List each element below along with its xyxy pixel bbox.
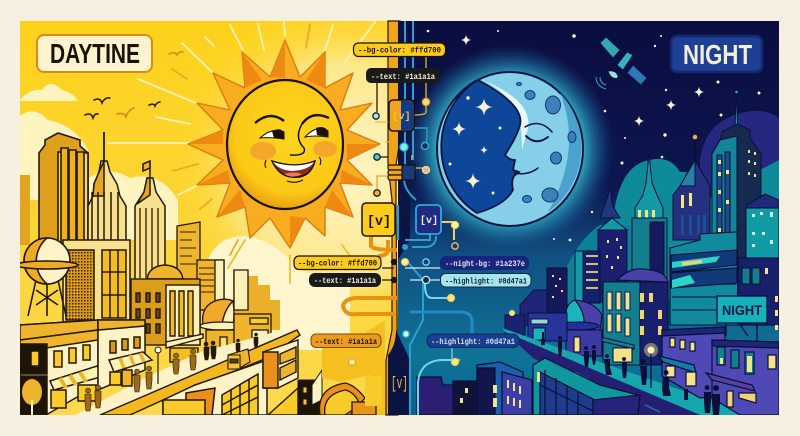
code label: middle text: --text: #1a1a1a — [314, 276, 376, 286]
mid tall building — [63, 240, 130, 322]
code label: highlight — [440, 274, 531, 287]
code label: middle text — [309, 273, 381, 287]
road — [100, 330, 300, 415]
dark towers — [505, 218, 667, 335]
night pedestrians — [541, 332, 720, 415]
street sidewalk — [75, 332, 272, 415]
yellow chip — [362, 203, 395, 236]
orange traces — [343, 236, 397, 314]
code label: lower text: --text: #1a1a1a — [315, 337, 377, 347]
code label: lower highlight: --highlight: #0d47a1 — [431, 337, 515, 347]
blue chip: [v] — [420, 215, 438, 227]
code label: top bg-color — [354, 43, 446, 56]
lower day yellow block — [322, 320, 385, 415]
tall tower — [39, 133, 88, 250]
dark night divider — [398, 21, 410, 415]
moon night side — [441, 80, 520, 213]
lower dark divider — [388, 330, 410, 415]
teal spire building — [600, 153, 663, 240]
day sky — [20, 21, 398, 415]
code label: top text: --text: #1a1a1a — [371, 72, 435, 82]
night sidewalk — [502, 328, 753, 415]
sun cheeks — [250, 141, 337, 160]
top split chip: [v] — [392, 111, 411, 123]
moon face — [514, 123, 552, 174]
domed building — [131, 265, 203, 362]
code label: night-bg — [440, 256, 529, 270]
code label: middle bg-color: --bg-color: #ffd700 — [298, 258, 377, 268]
satellite — [596, 37, 647, 89]
water tower — [16, 238, 78, 316]
label: daytime title: DAYTINE — [50, 38, 140, 69]
street lamp glow — [644, 343, 658, 388]
foreground building — [163, 360, 267, 415]
glow node — [348, 358, 356, 366]
top split chip — [389, 100, 414, 131]
sun smile — [265, 157, 321, 182]
spire building — [87, 132, 127, 240]
night shops — [659, 327, 779, 415]
connector nodes — [373, 98, 458, 366]
tree — [22, 379, 42, 415]
label: daytime title — [37, 35, 152, 72]
sun eyes and brows — [255, 115, 329, 155]
code label: lower text — [311, 334, 381, 348]
night foreground buildings — [417, 358, 640, 415]
domed night building — [596, 269, 668, 365]
night road — [505, 332, 700, 415]
corner shop — [20, 320, 104, 415]
code label: top bg-color: --bg-color: #ffd700 — [358, 46, 441, 56]
far tan building — [177, 222, 248, 310]
moon crescent highlight — [480, 79, 528, 150]
flag building — [135, 161, 165, 280]
billboard text: NIGHT — [722, 302, 762, 318]
side building — [263, 340, 298, 415]
sun light beams — [108, 22, 375, 283]
code label: lower highlight — [427, 334, 519, 348]
yellow trace lines — [375, 57, 454, 360]
road marks — [575, 372, 660, 412]
label: night title: NIGHT — [683, 39, 752, 70]
moon craters — [516, 82, 576, 202]
night billboard — [717, 296, 767, 345]
coupler bands — [388, 165, 415, 180]
night sky — [398, 21, 779, 415]
code label: middle bg-color — [294, 256, 381, 270]
big tower — [712, 90, 761, 260]
ground shapes — [320, 376, 382, 415]
code label: night-bg: --night-bg: #1a237e — [445, 259, 525, 269]
divider background — [386, 21, 400, 415]
moon — [437, 72, 583, 226]
low night shop — [528, 313, 567, 341]
blue traces — [398, 21, 472, 415]
code label: top text — [366, 68, 440, 83]
large teal building — [670, 232, 779, 330]
sun face disc — [227, 80, 343, 209]
moon stars — [448, 96, 502, 194]
bottom chip: [v] — [391, 376, 408, 394]
right block — [746, 194, 779, 268]
moon shaded rim — [548, 93, 581, 212]
night clouds — [555, 111, 779, 320]
black building — [298, 370, 322, 415]
moon glow — [410, 48, 610, 244]
sun rays — [188, 40, 380, 248]
left far building — [20, 175, 30, 245]
label: night title — [671, 36, 762, 72]
second shop — [98, 320, 152, 390]
observatory — [200, 299, 271, 354]
tan skyline — [233, 270, 280, 330]
central circuit divider — [343, 21, 472, 415]
code label: highlight: --highlight: #0d47a1 — [445, 276, 527, 286]
sun ray shading — [188, 40, 380, 248]
stars — [427, 30, 760, 241]
yellow chip: [v] — [367, 214, 391, 230]
gold spire building — [673, 135, 710, 240]
panel: night — [398, 21, 779, 415]
birds — [85, 52, 183, 118]
pedestrians — [85, 333, 258, 411]
panel: daytime — [16, 21, 398, 415]
moon disc — [437, 72, 583, 226]
delivery bus — [228, 349, 250, 369]
street lamp — [155, 347, 161, 384]
blue chip — [416, 205, 441, 234]
night observatory — [557, 300, 602, 356]
